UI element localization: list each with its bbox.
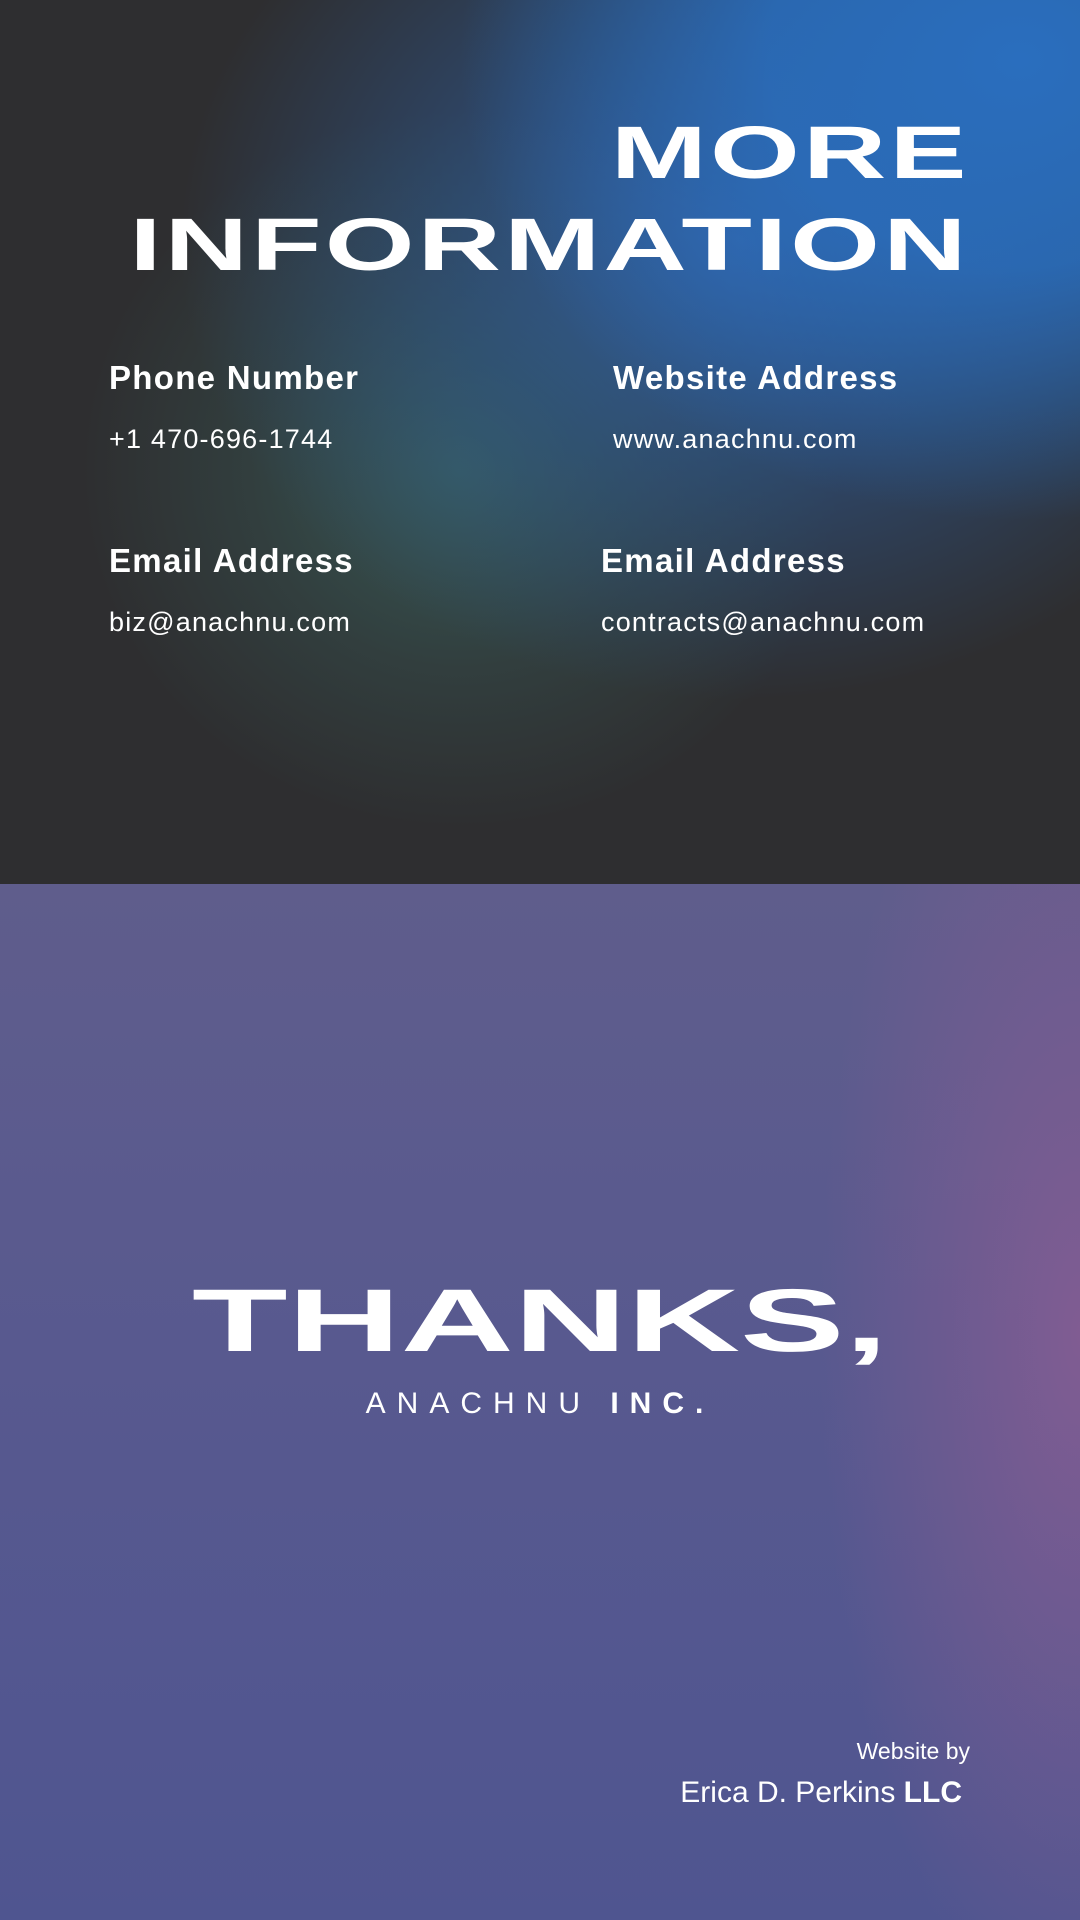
credit: author: Erica D. Perkins LLC — [680, 1776, 962, 1809]
value: email 1: biz@anachnu.com — [109, 607, 351, 637]
subtitle: company: ANACHNU INC. — [366, 1387, 714, 1420]
label: website: Website Address — [613, 359, 898, 396]
credit: website by: Website by — [857, 1738, 970, 1764]
value: email 2: contracts@anachnu.com — [601, 607, 925, 637]
heading: thanks: THANKS, — [192, 1270, 888, 1370]
label: phone: Phone Number — [109, 359, 359, 396]
panel: bottom thanks section — [0, 884, 1080, 1920]
title — [130, 111, 970, 286]
title: MORE — [611, 111, 970, 194]
label: email 1: Email Address — [109, 542, 354, 579]
value: phone: +1 470-696-1744 — [109, 424, 333, 454]
label: email 2: Email Address — [601, 542, 846, 579]
title: INFORMATION — [130, 203, 970, 286]
panel: top information section — [0, 0, 1080, 884]
value: website: www.anachnu.com — [613, 424, 858, 454]
